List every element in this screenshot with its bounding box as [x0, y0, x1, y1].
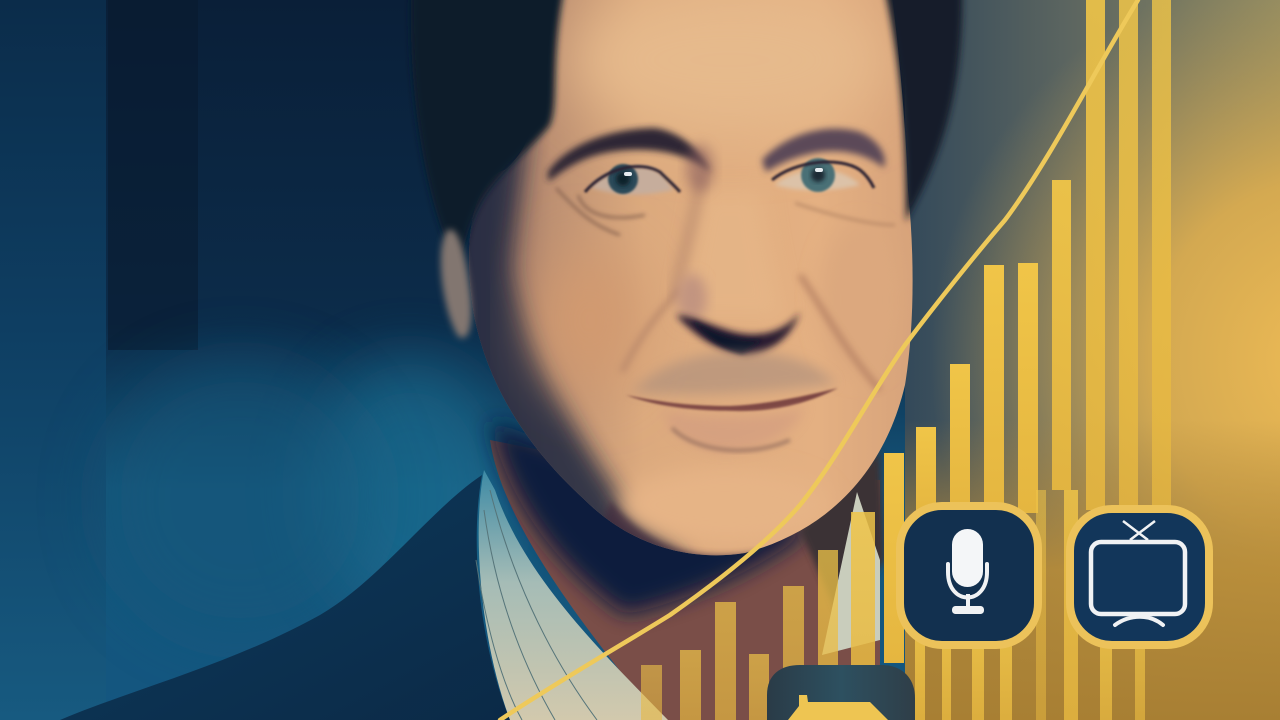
- right brow: [762, 129, 885, 172]
- chin highlight: [620, 467, 830, 543]
- icon: television tile: [1070, 509, 1209, 645]
- jacket: [60, 475, 510, 720]
- right eye: [772, 158, 895, 225]
- rising trend line: [500, 0, 1138, 720]
- right cheek crease: [800, 275, 880, 390]
- nose: [632, 170, 836, 394]
- right cheek warmth: [820, 225, 900, 375]
- left crease: [622, 290, 680, 372]
- left eye: [556, 164, 680, 235]
- brow shadow between eyes: [686, 144, 714, 192]
- neck: [490, 440, 880, 720]
- face: [469, 0, 913, 556]
- face left shadow: [469, 137, 694, 554]
- chin rim shadow: [604, 500, 752, 556]
- upper lip shadow: [632, 352, 836, 394]
- shirt collar with stripes: [476, 470, 880, 720]
- icon: house tile: [767, 665, 915, 720]
- icon: microphone tile: [900, 506, 1038, 645]
- ear: [441, 229, 472, 338]
- under jaw shadow right: [800, 450, 885, 620]
- mouth: [626, 388, 838, 452]
- left brow: [548, 128, 710, 182]
- bar chart: [641, 0, 1171, 720]
- lower thin bar segments: [915, 640, 925, 720]
- left cheek warmth: [540, 250, 640, 390]
- hair: [411, 0, 962, 270]
- neck shadow: [490, 420, 810, 615]
- forehead highlight: [570, 0, 890, 135]
- background: golden gradient on the right: [905, 0, 1280, 720]
